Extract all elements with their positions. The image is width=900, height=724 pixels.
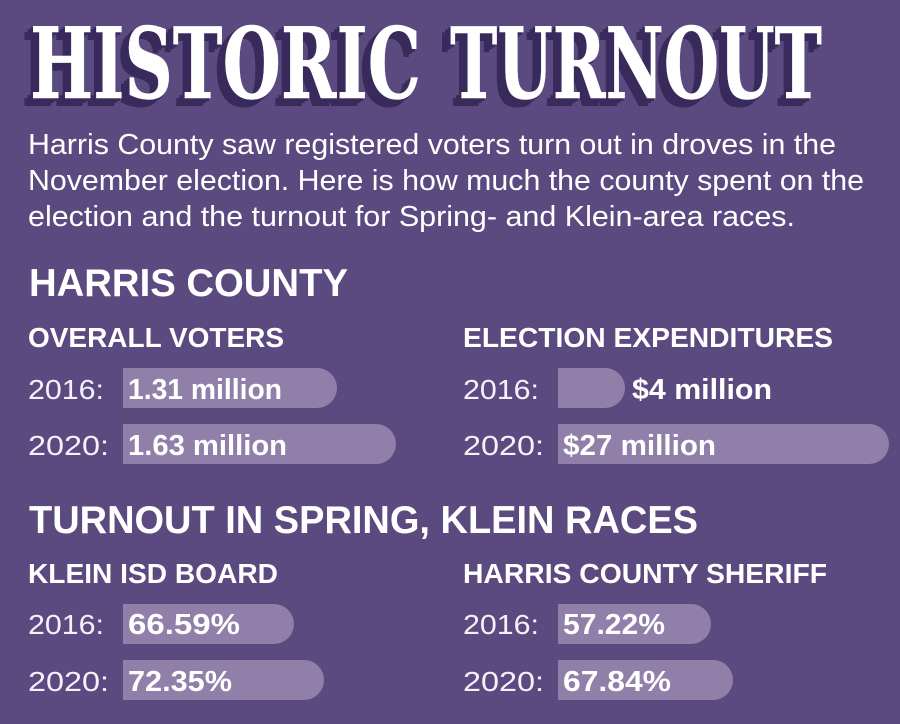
bar row: overall voters 2016: 2016: [28, 374, 104, 405]
title: HISTORIC [22, 14, 413, 129]
bar row: sheriff 2020: 67.84% [563, 666, 671, 698]
bar row: Klein ISD 2020 [28, 660, 324, 700]
subheading: election expenditures: ELECTION EXPENDITURES [463, 322, 833, 353]
bar row: overall voters 2020: 2020: [28, 430, 109, 461]
bar row: expenditures 2016: 2016: [463, 374, 539, 405]
intro text: election and the turnout for Spring- and Klein-area races. [28, 201, 795, 233]
title: HISTORIC [25, 11, 416, 126]
bar row: overall voters 2016: 1.31 million [128, 374, 282, 406]
bar row: expenditures 2020 [463, 424, 889, 464]
heading: turnout in Spring, Klein races: TURNOUT IN SPRING, KLEIN RACES [29, 499, 698, 542]
bar row: Klein ISD 2016: 2016: [28, 609, 104, 640]
heading: Harris County: HARRIS COUNTY [29, 262, 348, 305]
bar row: expenditures 2016: $4 million [632, 374, 772, 406]
subheading: overall voters: OVERALL VOTERS [28, 322, 284, 353]
bar row: sheriff 2016: 57.22% [563, 609, 665, 641]
bar row: Klein ISD 2020: 72.35% [128, 666, 232, 698]
title: HISTORIC [30, 7, 421, 122]
bar row: expenditures 2020: 2020: [463, 430, 544, 461]
title: HISTORIC [28, 9, 419, 124]
bar row: overall voters 2020 [28, 424, 396, 464]
panel: Klein ISD board [28, 558, 324, 700]
bar row: sheriff 2020: 2020: [463, 666, 544, 697]
subheading: Harris County sheriff: HARRIS COUNTY SHERIFF [463, 558, 827, 589]
bar row: sheriff 2016 [463, 604, 711, 644]
intro text [28, 129, 864, 233]
intro text: Harris County saw registered voters turn out in droves in the [28, 129, 836, 161]
bar row: expenditures 2020: $27 million [563, 430, 716, 462]
bar row: overall voters 2020: 1.63 million [128, 430, 287, 462]
panel: election expenditures [463, 322, 889, 464]
bar row: sheriff 2016: 2016: [463, 609, 539, 640]
subheading: Klein ISD board: KLEIN ISD BOARD [28, 558, 278, 589]
panel: overall voters [28, 322, 396, 464]
bar row: overall voters 2016 [28, 368, 337, 408]
bar row: Klein ISD 2020: 2020: [28, 666, 109, 697]
title [22, 7, 822, 129]
bar row: sheriff 2020 [463, 660, 733, 700]
intro text: November election. Here is how much the county spent on the [28, 165, 864, 197]
panel: Harris County sheriff [463, 558, 827, 700]
bar row: expenditures 2016 [463, 368, 772, 408]
bar row: Klein ISD 2016: 66.59% [128, 609, 240, 641]
bar row: Klein ISD 2016 [28, 604, 294, 644]
